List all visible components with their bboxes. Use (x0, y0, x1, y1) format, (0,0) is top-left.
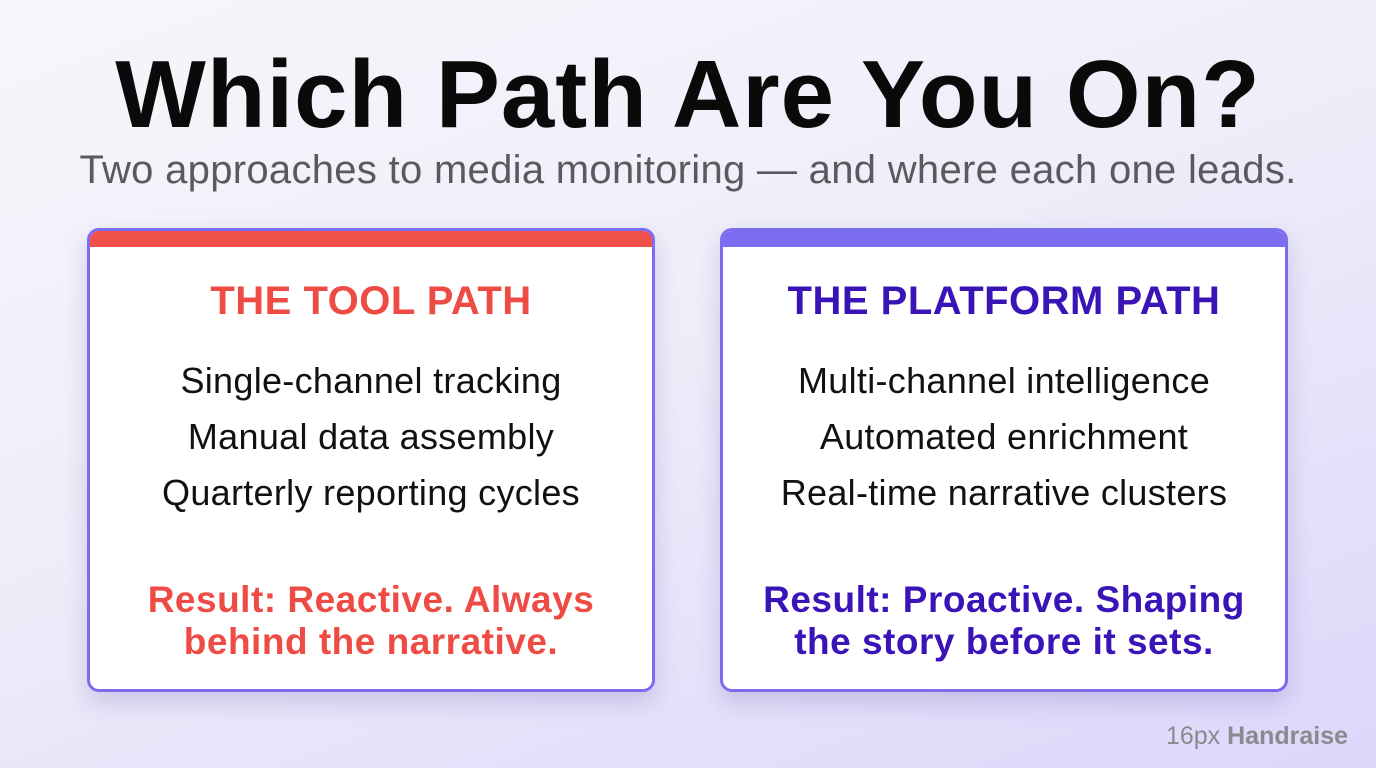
result: tool path: behind the narrative. (184, 621, 558, 662)
result: platform path: Result: Proactive. Shaping (763, 579, 1245, 620)
list: platform path features (781, 360, 1227, 513)
result: platform path (763, 579, 1245, 662)
result: platform path: the story before it sets. (794, 621, 1214, 662)
list: platform path features: Automated enrichment (820, 416, 1188, 457)
list: tool path features: Quarterly reporting cycles (162, 472, 580, 513)
list: platform path features: Multi-channel intelligence (798, 360, 1210, 401)
list: tool path features: Manual data assembly (188, 416, 554, 457)
list: tool path features (162, 360, 580, 513)
heading: tool path: THE TOOL PATH (210, 279, 532, 323)
panel: tool path (87, 228, 655, 692)
subtitle: Two approaches to media monitoring — and where each one leads. (79, 148, 1297, 192)
result: tool path (148, 579, 594, 662)
logo: 16px Handraise (1166, 722, 1348, 750)
panel: platform path (720, 228, 1288, 692)
list: tool path features: Single-channel tracking (180, 360, 562, 401)
title: Which Path Are You On? (115, 41, 1261, 148)
heading: platform path: THE PLATFORM PATH (788, 279, 1220, 323)
list: platform path features: Real-time narrative clusters (781, 472, 1227, 513)
result: tool path: Result: Reactive. Always (148, 579, 594, 620)
